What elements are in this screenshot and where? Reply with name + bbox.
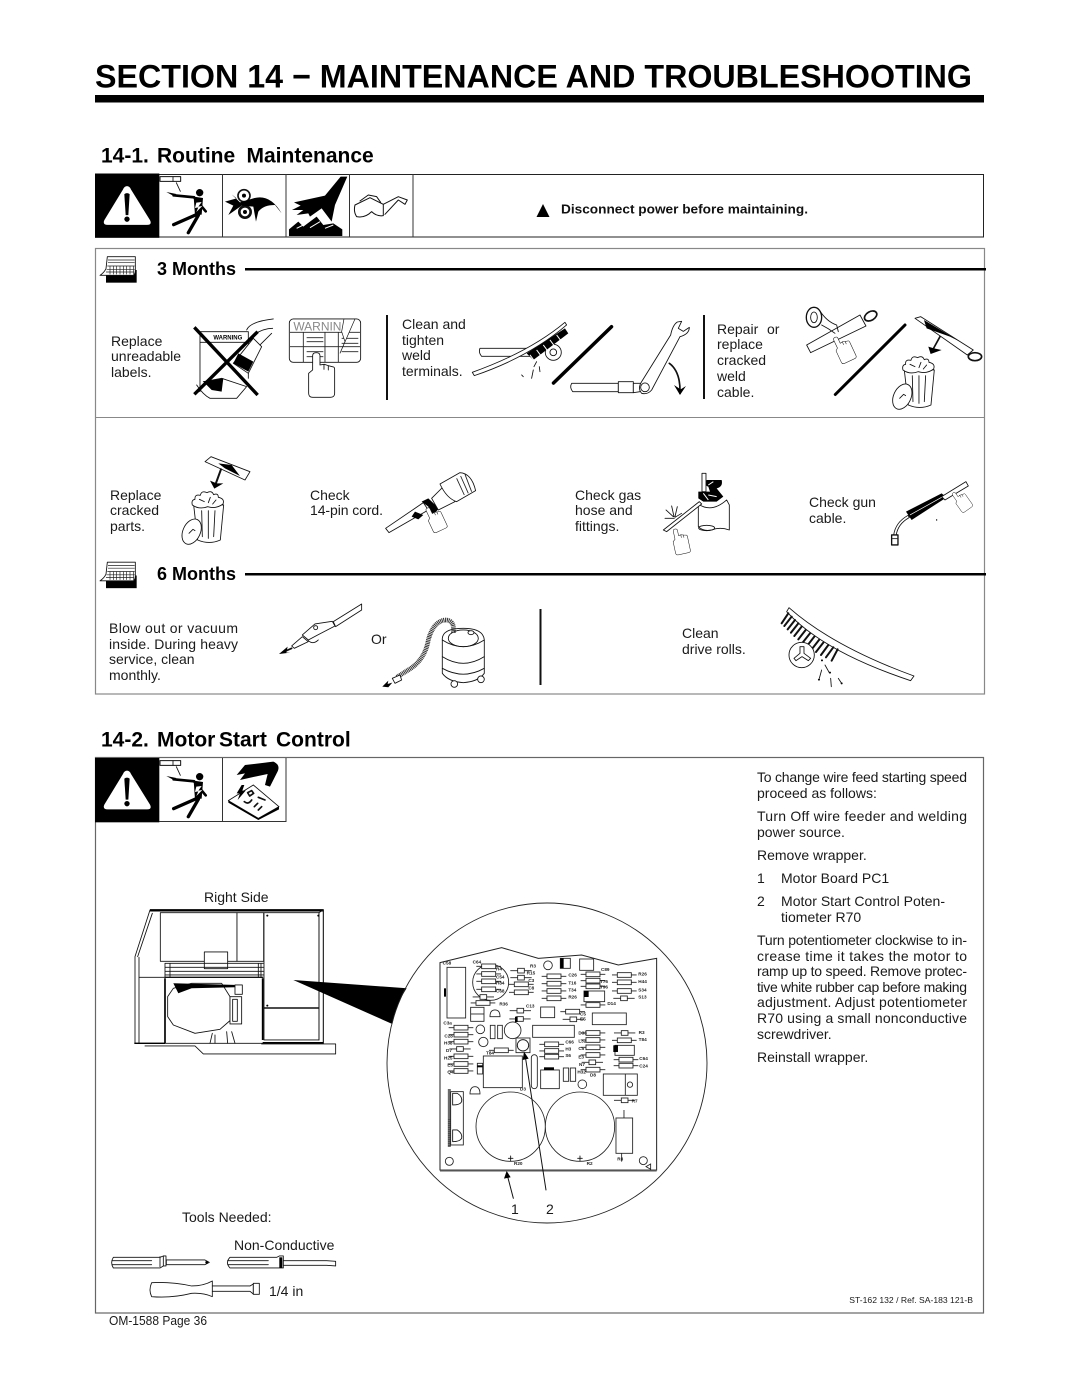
illustration: magnified circuit board: T84 bbox=[486, 1050, 494, 1055]
task: blow out: Blow out or vacuum bbox=[109, 620, 238, 636]
illustration: magnified circuit board: C28 bbox=[444, 1034, 453, 1039]
icon: calendar 3 months bbox=[100, 257, 137, 283]
illustration: magnified circuit board: H3 bbox=[565, 1047, 572, 1052]
illustration: magnified circuit board: R3 bbox=[639, 1030, 645, 1035]
heading: routine maintenance: Routine bbox=[157, 144, 235, 168]
illustration: magnified circuit board: S13 bbox=[638, 995, 647, 1000]
illustration: magnified circuit board: R26 bbox=[638, 972, 647, 977]
icon: hand and static board bbox=[228, 762, 279, 820]
illustration: magnified circuit board: L32 bbox=[578, 1038, 587, 1043]
illustration: magnified circuit board: N7 bbox=[579, 1062, 585, 1067]
text: instructions: Turn Off wire feeder and welding bbox=[757, 808, 967, 824]
illustration: magnified circuit board: C8 bbox=[528, 985, 535, 990]
task: clean drive rolls: drive rolls. bbox=[682, 641, 746, 657]
icon: taped cable with hand bbox=[806, 307, 879, 364]
icon: hot parts hand and flames bbox=[289, 177, 347, 236]
footer: page number: OM-1588 Page 36 bbox=[109, 1313, 207, 1328]
illustration: magnified circuit board: H44 bbox=[638, 979, 647, 984]
icon: wire brush on drive roll bbox=[782, 608, 914, 687]
illustration: magnified circuit board: T16 bbox=[568, 980, 577, 985]
task: blow out bbox=[109, 604, 484, 687]
task: replace labels: labels. bbox=[111, 364, 151, 380]
illustration: magnified circuit board: H32 bbox=[577, 1069, 586, 1074]
task: check 14-pin cord: 14-pin cord. bbox=[310, 502, 383, 518]
task: replace cracked parts: parts. bbox=[110, 518, 145, 534]
illustration: magnified circuit board: C3a bbox=[443, 1021, 452, 1026]
illustration: magnified circuit board: C13 bbox=[526, 1003, 535, 1008]
text: figure reference: ST-162 132 / Ref. SA-183 121-B bbox=[849, 1295, 973, 1305]
text: instructions: Reinstall wrapper. bbox=[757, 1049, 868, 1065]
illustration: magnified circuit board: R4 bbox=[496, 966, 502, 971]
icon: small warning triangle bbox=[536, 204, 550, 217]
illustration: magnified circuit board: R8 bbox=[617, 1157, 624, 1162]
icon: wrench tightening terminal bbox=[571, 321, 689, 395]
text: 1/4 in: 1/4 in bbox=[269, 1283, 303, 1299]
illustration: magnified circuit board: C5 bbox=[580, 1011, 586, 1016]
rule: 3 months bbox=[245, 268, 986, 270]
task: check gas hose bbox=[575, 473, 729, 555]
heading: routine maintenance: Maintenance bbox=[246, 144, 374, 168]
illustration: magnified circuit board: R2 bbox=[587, 1161, 593, 1166]
illustration: magnified circuit board: E5 bbox=[580, 1017, 586, 1022]
task: check gas hose: hose and bbox=[575, 502, 633, 518]
icon: cracked part into trash bbox=[178, 457, 250, 547]
illustration: magnified circuit board: S34 bbox=[638, 988, 647, 993]
divider bbox=[386, 315, 388, 400]
illustration: magnified circuit board: T96 bbox=[600, 985, 608, 990]
text: instructions: To change wire feed starting speed bbox=[757, 769, 967, 785]
task: check gun cable bbox=[809, 482, 973, 545]
icon: tools bbox=[112, 1256, 336, 1297]
illustration: magnified circuit board: D8 bbox=[590, 1073, 596, 1078]
icon: label with brush crossed out: WARNING bbox=[213, 336, 243, 342]
text: callout numbers: 2 bbox=[546, 1201, 554, 1217]
illustration: magnified circuit board: C68 bbox=[496, 988, 505, 993]
task: repair cable: replace bbox=[717, 336, 763, 352]
text: instructions: 1 bbox=[757, 870, 765, 886]
illustration: magnified circuit board: T84 bbox=[639, 1037, 647, 1042]
task: repair cable: or bbox=[767, 321, 780, 337]
icon: 14-pin plug and hand bbox=[386, 473, 476, 533]
panel: warning strip routine maintenance bbox=[95, 174, 984, 238]
icon: air blow gun bbox=[279, 604, 362, 654]
task: repair cable: cable. bbox=[717, 384, 754, 400]
text: disconnect power: Disconnect power before maintaining. bbox=[561, 202, 808, 216]
text: instructions: proceed as follows: bbox=[757, 785, 877, 801]
task: repair cable: cracked bbox=[717, 352, 766, 368]
illustration: magnified circuit board: C64 bbox=[473, 959, 482, 964]
illustration: magnified circuit board: C5 bbox=[578, 1046, 585, 1051]
icon: electric shock man bbox=[160, 761, 206, 817]
icon: electric shock man bbox=[160, 177, 206, 233]
text: non-conductive: Non-Conductive bbox=[234, 1237, 335, 1253]
task: clean terminals: tighten bbox=[402, 332, 444, 348]
icon: warning triangle bbox=[95, 174, 159, 238]
text: instructions: tiometer R70 bbox=[781, 909, 861, 925]
text: instructions: Remove wrapper. bbox=[757, 847, 867, 863]
text: instructions: tive white rubber cap before making bbox=[757, 979, 967, 995]
icon: replace cable into trash bbox=[889, 317, 982, 412]
callout arrows bbox=[508, 1057, 546, 1198]
text: instructions: Motor Board PC1 bbox=[781, 870, 889, 886]
panel: maintenance schedule bbox=[95, 248, 986, 694]
icon: moving parts gears and hand bbox=[225, 190, 282, 222]
divider bbox=[540, 609, 542, 685]
illustration: magnified circuit board: D7 bbox=[446, 1048, 452, 1053]
illustration: machine right side bbox=[134, 910, 407, 1054]
illustration: magnified circuit board: C54 bbox=[496, 974, 505, 979]
task: blow out: service, clean bbox=[109, 651, 195, 667]
illustration: magnified circuit board: C89 bbox=[601, 967, 610, 972]
icon: gun cable with hand bbox=[892, 482, 973, 545]
task: clean terminals: Clean and bbox=[402, 316, 466, 332]
icon: warning label card and pointing hand bbox=[289, 319, 361, 397]
illustration: magnified circuit board: D14 bbox=[607, 1001, 616, 1006]
slash: or separator bbox=[835, 325, 905, 394]
illustration: magnified circuit board: R36 bbox=[499, 1002, 508, 1007]
task: repair cable: weld bbox=[716, 368, 746, 384]
illustration: magnified circuit board: Q4 bbox=[447, 1069, 454, 1074]
heading: motor start control: Motor bbox=[157, 728, 215, 752]
heading: motor start control: Control bbox=[276, 728, 351, 752]
task: replace cracked parts bbox=[110, 457, 250, 547]
illustration: magnified circuit board: C3 bbox=[528, 978, 535, 983]
task: clean terminals bbox=[401, 316, 689, 395]
icon: hazard cells bbox=[222, 174, 413, 237]
heading: motor start control: Start bbox=[219, 728, 267, 752]
text: tools needed: Tools Needed: bbox=[182, 1209, 272, 1225]
task: repair cable bbox=[716, 307, 982, 412]
illustration: magnified circuit board: R7 bbox=[632, 1099, 638, 1104]
illustration: magnified circuit board: E5 bbox=[447, 1063, 453, 1068]
task: check 14-pin cord bbox=[310, 473, 476, 533]
task: clean terminals: weld bbox=[401, 347, 431, 363]
title: SECTION 14 − MAINTENANCE AND TROUBLESHOOTING bbox=[95, 58, 972, 94]
illustration: magnified circuit board: C64 bbox=[639, 1056, 648, 1061]
text: instructions: ramp up to speed. Remove protec- bbox=[757, 963, 967, 979]
text: instructions bbox=[757, 769, 967, 1065]
text: instructions: power source. bbox=[757, 824, 845, 840]
task: repair cable: Repair bbox=[717, 321, 759, 337]
slash: or separator bbox=[554, 327, 612, 383]
text: or: Or bbox=[371, 631, 387, 647]
task: replace labels bbox=[111, 319, 361, 398]
text: instructions: 2 bbox=[757, 893, 765, 909]
text: instructions: R70 using a small nonconductive bbox=[757, 1010, 967, 1026]
task: replace cracked parts: Replace bbox=[110, 487, 162, 503]
icon: warning label card and pointing hand: WARNIN bbox=[293, 319, 341, 333]
text: right side: Right Side bbox=[204, 889, 269, 905]
divider bbox=[703, 315, 705, 399]
task: check gun cable: cable. bbox=[809, 510, 846, 526]
illustration: magnified circuit board: C26 bbox=[568, 973, 577, 978]
task: replace labels: Replace bbox=[111, 333, 163, 349]
text: instructions: screwdriver. bbox=[757, 1026, 832, 1042]
illustration: magnified circuit board: R84 bbox=[496, 981, 505, 986]
icon: label with brush crossed out bbox=[194, 319, 273, 398]
text: instructions: crease time it takes the motor to bbox=[757, 948, 967, 964]
illustration: magnified circuit board: S6 bbox=[565, 1053, 571, 1058]
heading: motor start control: 14-2. bbox=[101, 728, 149, 752]
illustration: magnified circuit board: T76 bbox=[600, 979, 608, 984]
task: clean drive rolls bbox=[682, 608, 914, 687]
icon: calendar 6 months bbox=[100, 562, 137, 588]
icon: vacuum cleaner bbox=[382, 620, 484, 687]
task: clean terminals: terminals. bbox=[402, 363, 463, 379]
illustration: magnified circuit board: C24 bbox=[639, 1064, 648, 1069]
illustration: magnified circuit board: R20 bbox=[514, 1161, 523, 1166]
task: blow out: monthly. bbox=[109, 667, 161, 683]
panel: motor start control bbox=[95, 758, 984, 1313]
illustration: magnified circuit board bbox=[387, 903, 707, 1223]
icon: warning triangle bbox=[95, 758, 159, 822]
text: instructions: adjustment. Adjust potentiometer bbox=[757, 994, 967, 1010]
illustration: magnified circuit board: E3 bbox=[578, 1054, 584, 1059]
rule: 6 months bbox=[245, 573, 986, 576]
task: check gas hose: Check gas bbox=[575, 487, 641, 503]
illustration: magnified circuit board: R26 bbox=[568, 995, 577, 1000]
illustration: magnified circuit board: C66 bbox=[565, 1039, 574, 1044]
icon: safety goggles bbox=[354, 195, 407, 217]
icon: gas cylinder and hose bbox=[663, 473, 729, 555]
heading: routine maintenance: 14-1. bbox=[101, 144, 149, 168]
task: clean drive rolls: Clean bbox=[682, 625, 719, 641]
task: blow out: inside. During heavy bbox=[109, 636, 238, 652]
task: check gun cable: Check gun bbox=[809, 494, 876, 510]
text: callout numbers: 1 bbox=[511, 1201, 519, 1217]
heading: 6 months: 6 Months bbox=[157, 564, 236, 584]
illustration: magnified circuit board: C58 bbox=[443, 960, 452, 965]
icon: wire brush on terminal bbox=[472, 322, 568, 378]
illustration: magnified circuit board: R15 bbox=[527, 970, 536, 975]
task: check gas hose: fittings. bbox=[575, 518, 619, 534]
illustration: magnified circuit board: T34 bbox=[568, 988, 577, 993]
illustration: magnified circuit board: R3 bbox=[530, 963, 536, 968]
task: replace labels: unreadable bbox=[111, 348, 181, 364]
text: instructions: Motor Start Control Poten- bbox=[781, 893, 945, 909]
text: instructions: Turn potentiometer clockwise to in- bbox=[757, 932, 967, 948]
task: replace cracked parts: cracked bbox=[110, 502, 159, 518]
text: callout numbers bbox=[511, 1201, 554, 1217]
illustration: magnified circuit board: D33 bbox=[578, 1030, 587, 1035]
illustration: magnified circuit board: D3 bbox=[520, 1087, 526, 1092]
illustration: magnified circuit board: H38 bbox=[444, 1041, 453, 1046]
heading: 3 months: 3 Months bbox=[157, 259, 236, 279]
task: check 14-pin cord: Check bbox=[310, 487, 351, 503]
illustration: magnified circuit board: H25 bbox=[444, 1055, 453, 1060]
